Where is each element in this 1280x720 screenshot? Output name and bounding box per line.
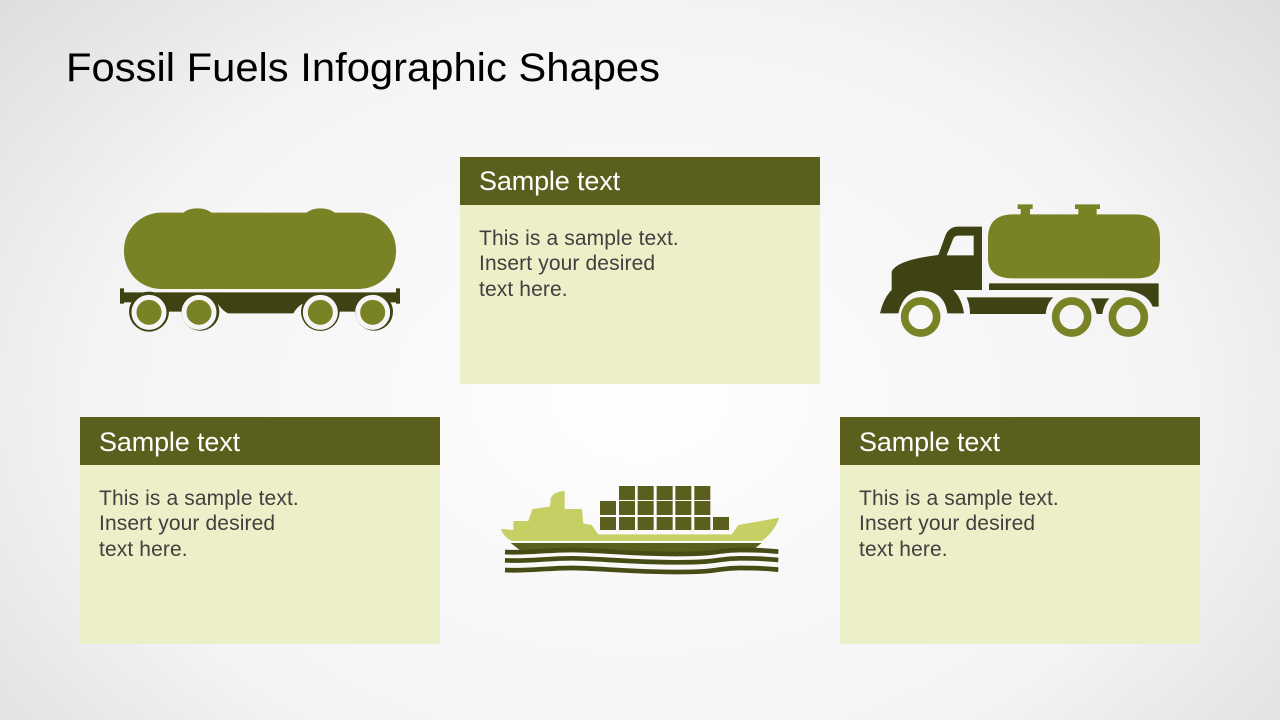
icon: tanker truck (880, 204, 1160, 337)
text block: top center: Insert your desired (479, 252, 655, 275)
tank (988, 204, 1160, 278)
title: Fossil Fuels Infographic Shapes (66, 46, 660, 90)
heading: bottom left: Sample text (99, 427, 240, 457)
containers (600, 486, 729, 530)
lower hull (511, 543, 762, 554)
text block: top center: text here. (479, 278, 568, 300)
icon: rail tank car (120, 208, 400, 332)
text block: bottom left (99, 486, 299, 560)
panel: bottom left (80, 417, 440, 644)
heading: top center: Sample text (479, 166, 620, 196)
panel: top center (460, 157, 820, 384)
text block: bottom left: text here. (99, 538, 188, 560)
text block: bottom right: This is a sample text. (859, 486, 1059, 510)
waves (505, 550, 778, 572)
hull (501, 491, 779, 541)
heading: bottom right (840, 417, 1200, 465)
panel: bottom right (840, 417, 1200, 644)
heading: bottom left (80, 417, 440, 465)
text block: bottom left: Insert your desired (99, 512, 275, 535)
cab and frame (880, 227, 1159, 314)
text block: bottom left: This is a sample text. (99, 486, 299, 510)
wheels (134, 297, 388, 327)
chassis (120, 288, 400, 332)
text block: bottom right: Insert your desired (859, 512, 1035, 535)
tank (124, 208, 396, 289)
heading: top center (460, 157, 820, 205)
text block: top center (479, 226, 679, 300)
text block: top center: This is a sample text. (479, 226, 679, 250)
text block: bottom right (859, 486, 1059, 560)
wheels (905, 301, 1144, 333)
icon: container ship (501, 486, 780, 574)
heading: bottom right: Sample text (859, 427, 1000, 457)
text block: bottom right: text here. (859, 538, 948, 560)
